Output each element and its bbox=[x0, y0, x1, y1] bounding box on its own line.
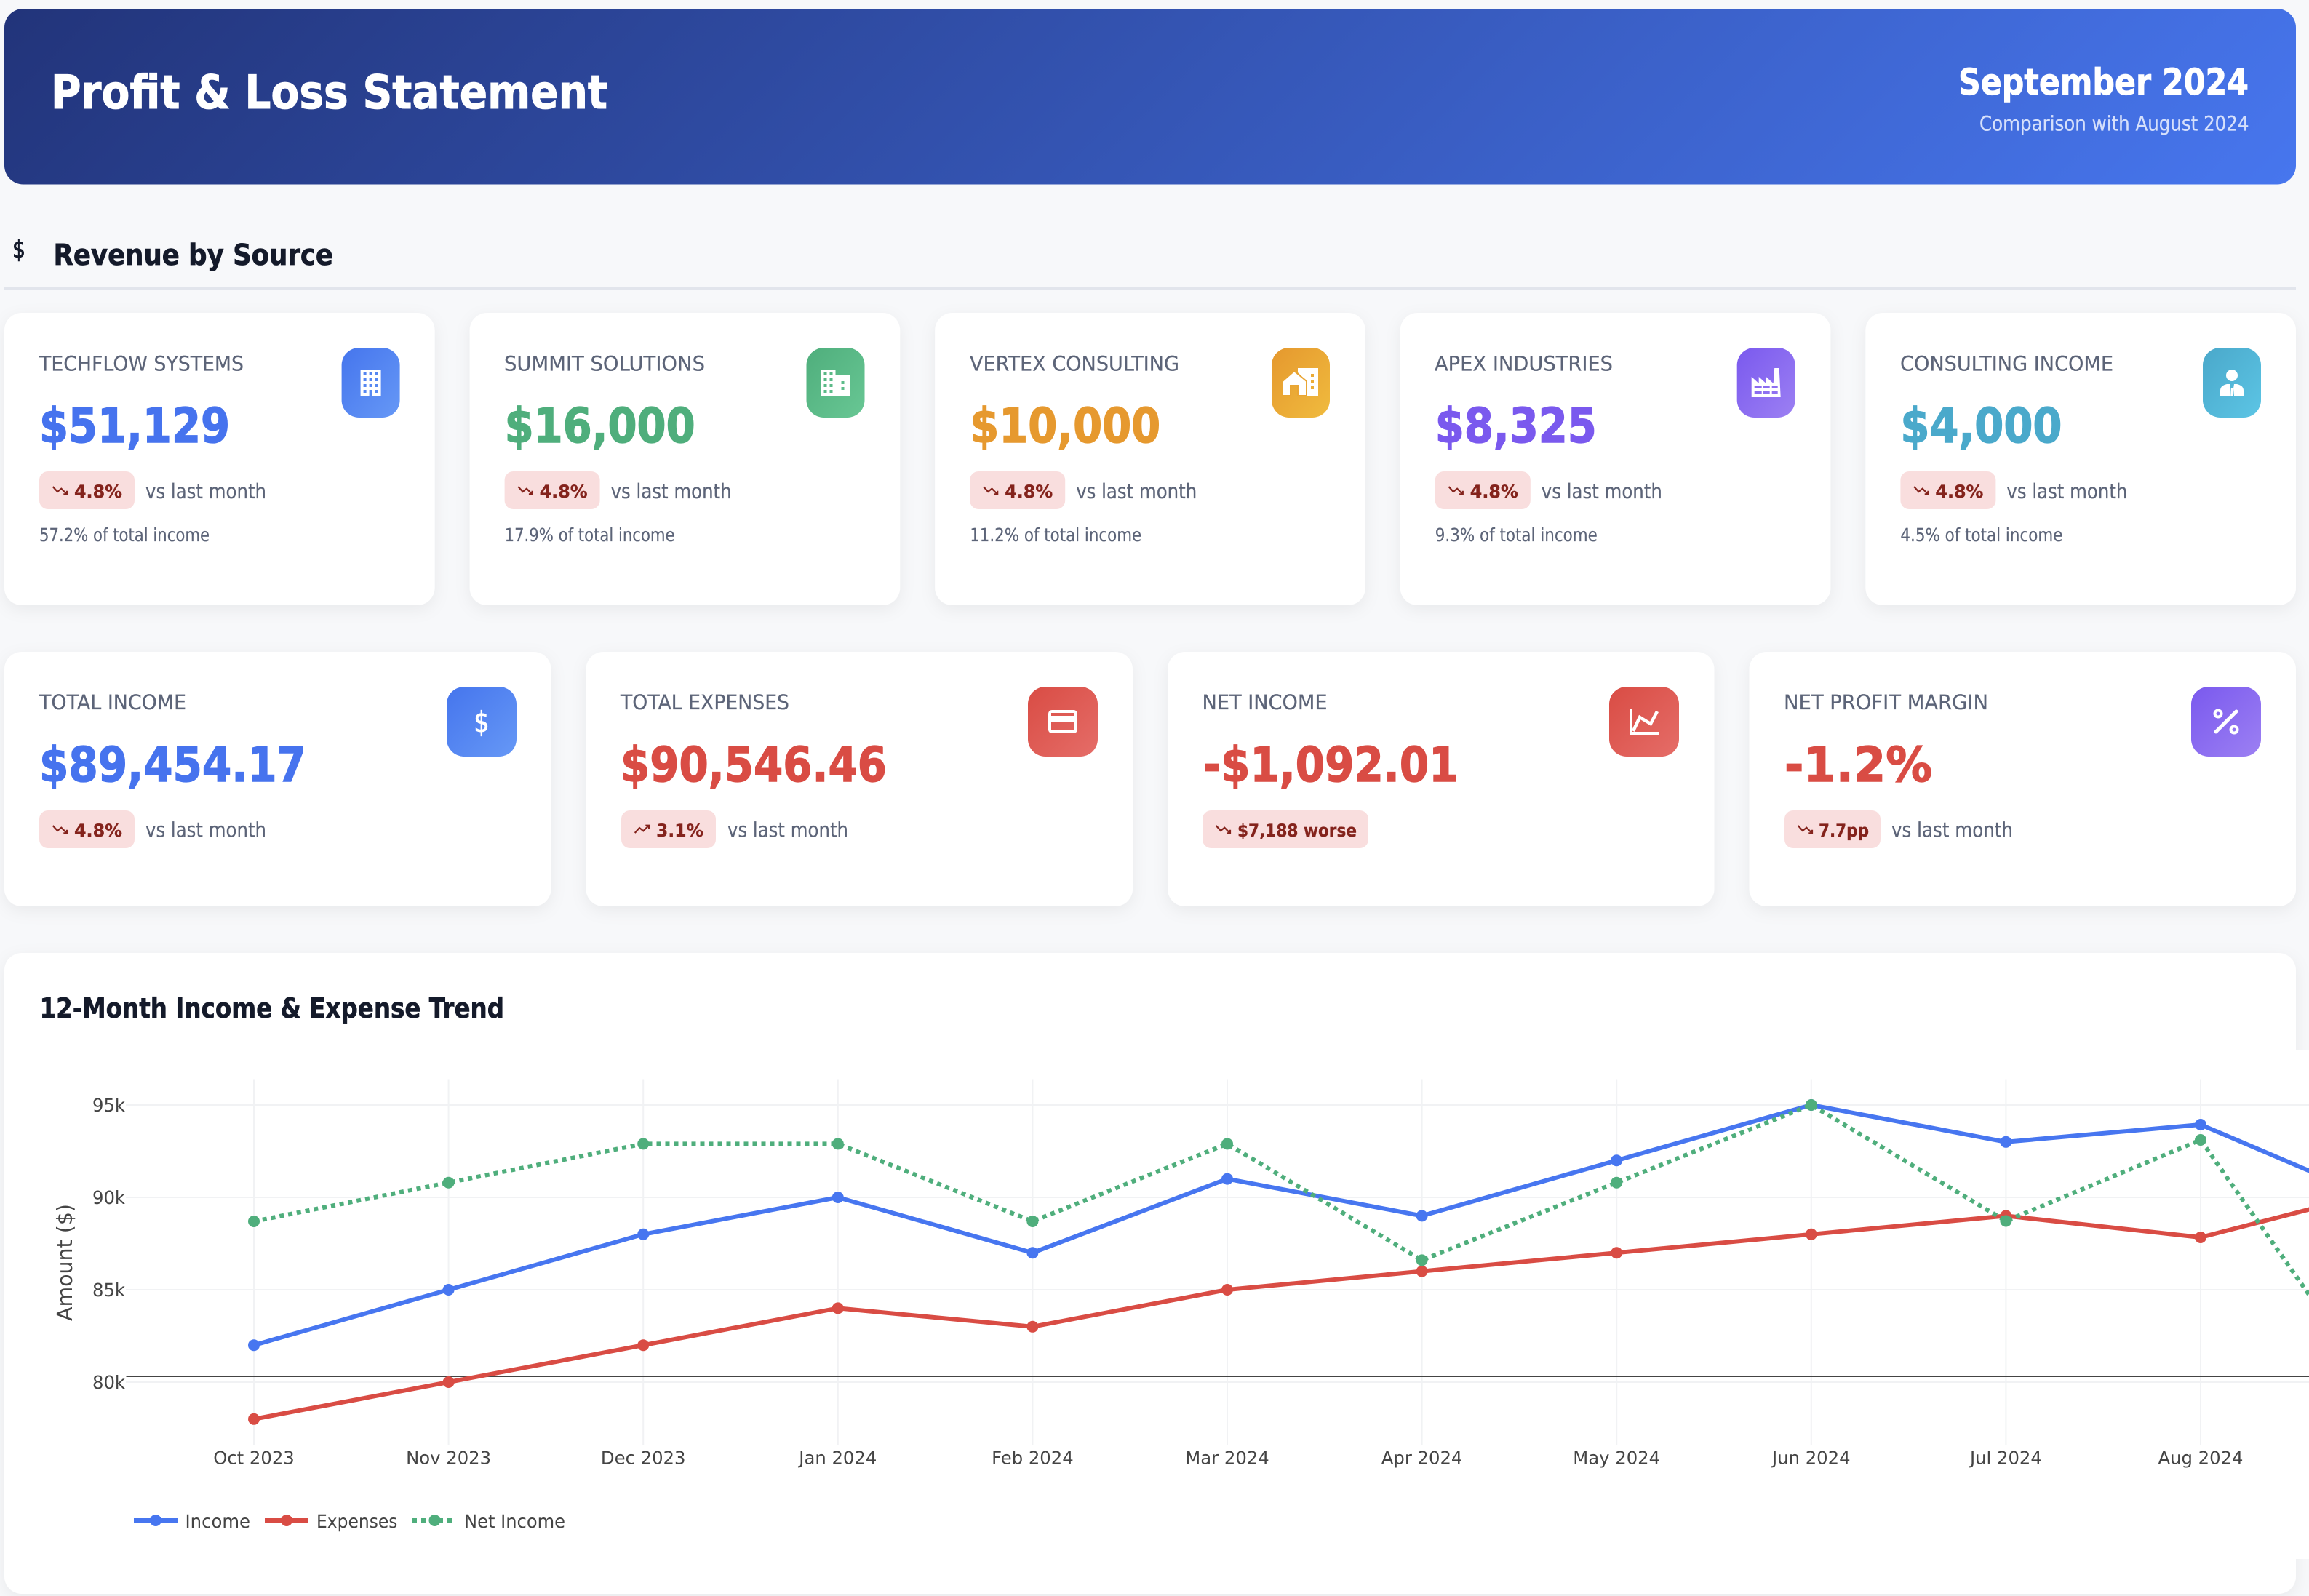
panel: Techflow Systems bbox=[4, 313, 435, 605]
change badge bbox=[621, 810, 716, 848]
icon: building bbox=[342, 348, 400, 418]
icon: person with tie bbox=[2203, 348, 2261, 418]
share of income: 11.2% of total income bbox=[970, 524, 1141, 546]
panel: Summit Solutions bbox=[470, 313, 900, 605]
legend: net income: Net Income bbox=[464, 1511, 565, 1532]
x axis labels: Oct 2023 bbox=[213, 1448, 295, 1468]
panel: Net Income bbox=[1168, 652, 1714, 906]
icon: line chart bbox=[1609, 687, 1679, 757]
icon: dollar: $ bbox=[474, 706, 489, 739]
x axis labels: Jan 2024 bbox=[797, 1448, 877, 1468]
label: SUMMIT SOLUTIONS bbox=[504, 352, 705, 375]
y axis labels: 85k bbox=[92, 1280, 126, 1301]
value: $89,454.17 bbox=[39, 737, 306, 793]
y axis title: Amount ($) bbox=[52, 1204, 77, 1321]
x axis labels: Feb 2024 bbox=[992, 1448, 1074, 1468]
icon: house and tower bbox=[1272, 348, 1330, 418]
comparison note: Comparison with August 2024 bbox=[1979, 112, 2249, 135]
panel: Vertex Consulting bbox=[935, 313, 1365, 605]
comparison note: vs last month bbox=[145, 818, 266, 842]
share of income: 9.3% of total income bbox=[1435, 524, 1598, 546]
comparison note: vs last month bbox=[611, 479, 732, 503]
series: expenses bbox=[248, 1187, 2309, 1425]
icon: credit card bbox=[1028, 687, 1098, 757]
panel: Total Income bbox=[4, 652, 551, 906]
change badge bbox=[1784, 810, 1881, 848]
x axis labels: Mar 2024 bbox=[1185, 1448, 1269, 1468]
label: NET INCOME bbox=[1202, 690, 1327, 714]
icon: percent bbox=[2191, 687, 2261, 757]
legend: income bbox=[134, 1511, 250, 1532]
x axis labels: Jul 2024 bbox=[1969, 1448, 2042, 1468]
comparison note: vs last month bbox=[1076, 479, 1197, 503]
change badge bbox=[1435, 471, 1531, 509]
legend: net income bbox=[412, 1511, 565, 1532]
icon: buildings bbox=[806, 348, 864, 418]
legend: expenses: Expenses bbox=[316, 1511, 397, 1532]
comparison note: vs last month bbox=[1891, 818, 2013, 842]
comparison note: vs last month bbox=[2006, 479, 2127, 503]
comparison note: vs last month bbox=[727, 818, 848, 842]
value: -1.2% bbox=[1784, 737, 1932, 793]
icon: factory bbox=[1737, 348, 1795, 418]
share of income: 4.5% of total income bbox=[1900, 524, 2062, 546]
change badge: 7.7pp bbox=[1819, 821, 1869, 841]
label: VERTEX CONSULTING bbox=[970, 352, 1179, 375]
change badge bbox=[1203, 810, 1368, 848]
change badge: 4.8% bbox=[1470, 482, 1518, 502]
x axis labels: Aug 2024 bbox=[2158, 1448, 2244, 1468]
x axis labels: Nov 2023 bbox=[406, 1448, 491, 1468]
value: $8,325 bbox=[1435, 398, 1597, 454]
change badge bbox=[970, 471, 1065, 509]
panel: 12-month trend bbox=[4, 953, 2309, 1594]
value: $16,000 bbox=[505, 398, 695, 454]
icon: dollar bbox=[447, 687, 517, 757]
panel: Apex Industries bbox=[1400, 313, 1830, 605]
share of income: 57.2% of total income bbox=[39, 524, 210, 546]
x axis labels: Apr 2024 bbox=[1381, 1448, 1462, 1468]
y axis labels: 90k bbox=[92, 1187, 126, 1208]
legend: expenses bbox=[265, 1511, 397, 1532]
chart title: 12-Month Income & Expense Trend bbox=[39, 992, 504, 1024]
value: -$1,092.01 bbox=[1203, 737, 1458, 793]
change badge: 4.8% bbox=[1005, 482, 1053, 502]
label: NET PROFIT MARGIN bbox=[1784, 690, 1988, 714]
label: APEX INDUSTRIES bbox=[1435, 352, 1613, 375]
icon: dollar: $ bbox=[12, 235, 25, 263]
change badge bbox=[39, 810, 135, 848]
x axis labels: May 2024 bbox=[1573, 1448, 1660, 1468]
line chart bbox=[39, 1050, 2309, 1559]
reporting period: September 2024 bbox=[1958, 61, 2249, 103]
y axis labels bbox=[92, 1095, 126, 1393]
section heading: revenue by source bbox=[4, 235, 2296, 290]
x axis labels: Jun 2024 bbox=[1771, 1448, 1851, 1468]
value: $51,129 bbox=[39, 398, 230, 454]
legend bbox=[134, 1511, 565, 1532]
change badge: 4.8% bbox=[74, 482, 122, 502]
change badge bbox=[505, 471, 600, 509]
change badge bbox=[1900, 471, 1995, 509]
comparison note: vs last month bbox=[1542, 479, 1662, 503]
value: $90,546.46 bbox=[621, 737, 887, 793]
x axis labels: Dec 2023 bbox=[601, 1448, 685, 1468]
x axis labels bbox=[213, 1448, 2244, 1468]
change badge bbox=[39, 471, 135, 509]
header banner bbox=[4, 9, 2296, 185]
comparison note: vs last month bbox=[145, 479, 266, 503]
label: TOTAL EXPENSES bbox=[620, 690, 789, 714]
panel: Total Expenses bbox=[586, 652, 1133, 906]
share of income: 17.9% of total income bbox=[505, 524, 675, 546]
label: TECHFLOW SYSTEMS bbox=[39, 352, 244, 375]
series: income bbox=[248, 1099, 2309, 1351]
change badge: 4.8% bbox=[540, 482, 588, 502]
change badge: $7,188 worse bbox=[1237, 821, 1357, 841]
value: $4,000 bbox=[1900, 398, 2062, 454]
label: CONSULTING INCOME bbox=[1900, 352, 2113, 375]
title: Profit & Loss Statement bbox=[51, 66, 607, 120]
panel: Net Profit Margin bbox=[1749, 652, 2296, 906]
label: TOTAL INCOME bbox=[39, 690, 186, 714]
series: net income bbox=[248, 1099, 2309, 1418]
change badge: 4.8% bbox=[1935, 482, 1983, 502]
value: $10,000 bbox=[970, 398, 1160, 454]
change badge: 3.1% bbox=[656, 821, 703, 841]
change badge: 4.8% bbox=[74, 821, 122, 841]
panel: Consulting Income bbox=[1865, 313, 2296, 605]
heading text: Revenue by Source bbox=[54, 239, 333, 272]
legend: income: Income bbox=[185, 1511, 250, 1532]
y axis labels: 95k bbox=[92, 1095, 126, 1116]
y axis labels: 80k bbox=[92, 1372, 126, 1393]
